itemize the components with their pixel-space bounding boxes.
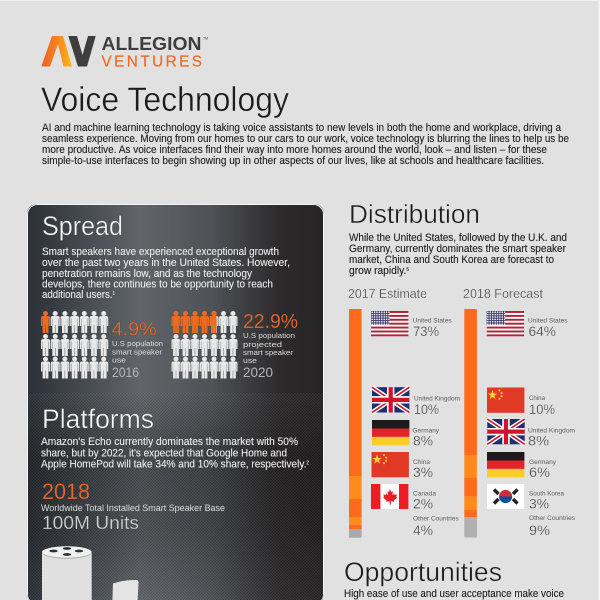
row: Other Countries 9%: Other Countries bbox=[529, 515, 575, 522]
row: United Kingdom 8%: United Kingdom bbox=[528, 428, 575, 435]
row: United States 64% bbox=[487, 311, 568, 339]
row: United States 73%: 73% bbox=[413, 323, 439, 339]
title: Voice Technology bbox=[41, 81, 289, 119]
distribution text block bbox=[349, 232, 567, 277]
row: United States 73%: United States bbox=[413, 318, 452, 325]
intro text block: AI and machine learning technology is taking voice assistants to new levels in both the home and workplace, driving a bbox=[42, 122, 561, 134]
stat: 4.9% in 2016 bbox=[112, 322, 162, 377]
row: United States 64%: United States bbox=[528, 318, 568, 325]
intro text block bbox=[42, 122, 569, 167]
heading: Platforms: Platforms bbox=[42, 404, 154, 434]
opportunities text block: High ease of use and user acceptance make voice bbox=[344, 588, 564, 600]
row: South Korea 3% bbox=[487, 484, 564, 512]
intro text block: more productive. As voice interfaces find their way into more homes around the world, look – and listen – for these bbox=[42, 144, 547, 156]
stat: 2018 installed base: 2018 bbox=[42, 479, 90, 504]
row: Canada 2% bbox=[371, 484, 436, 512]
heading: 2017 Estimate: 2017 Estimate bbox=[348, 287, 427, 301]
stat: 4.9% in 2016: 2016 bbox=[112, 364, 139, 380]
stat: 22.9% in 2020: smart speaker bbox=[243, 348, 293, 357]
logo: Allegion Ventures: ALLEGION bbox=[102, 33, 202, 54]
stacked bar: 2017 bbox=[349, 309, 362, 538]
stat: 22.9% in 2020: use bbox=[243, 356, 257, 365]
stat: 2018 installed base: Worldwide Total Installed Smart Speaker Base bbox=[41, 503, 225, 513]
platforms text block bbox=[41, 436, 309, 471]
heading: Spread: Spread bbox=[42, 211, 123, 241]
row: Germany 6%: 6% bbox=[529, 464, 550, 480]
pictogram: 2016 population bbox=[41, 311, 108, 378]
row: China 3%: China bbox=[413, 459, 430, 466]
icon: Amazon Echo speaker bbox=[42, 546, 92, 600]
spread text block: Smart speakers have experienced exceptional growth bbox=[42, 246, 279, 258]
stat: 22.9% in 2020 bbox=[243, 311, 298, 380]
stat: 4.9% in 2016: smart speaker bbox=[112, 348, 162, 356]
intro text block: simple-to-use interfaces to begin showing up in other aspects of our lives, like at schools and healthcare facilities. bbox=[42, 155, 544, 167]
heading: Opportunities: Opportunities bbox=[344, 557, 502, 587]
logo: Allegion Ventures: VENTURES bbox=[102, 54, 202, 71]
stat: 22.9% in 2020: U.S population bbox=[243, 331, 295, 340]
row: Germany 6% bbox=[487, 452, 557, 480]
row: United Kingdom 8% bbox=[487, 419, 575, 449]
row: United Kingdom 10%: 10% bbox=[414, 401, 439, 417]
column: 2018 forecast bbox=[463, 287, 575, 538]
row: China 10% bbox=[487, 388, 555, 417]
row: Germany 8%: Germany bbox=[412, 428, 440, 435]
row: Germany 8% bbox=[372, 420, 440, 449]
logo: Allegion Ventures bbox=[41, 33, 208, 71]
spread text block: develops, there continues to be opportunity to reach bbox=[42, 278, 273, 290]
stat: 2018 installed base bbox=[41, 484, 225, 529]
stat: 22.9% in 2020: projected bbox=[243, 340, 282, 349]
distribution text block: 5 bbox=[406, 267, 409, 273]
heading: Distribution: Distribution bbox=[349, 201, 480, 229]
stat: 22.9% in 2020: 2020 bbox=[243, 364, 273, 380]
row: United Kingdom 8%: 8% bbox=[528, 433, 549, 449]
heading: 2018 Forecast: 2018 Forecast bbox=[463, 287, 544, 301]
spread text block bbox=[42, 246, 290, 301]
row: China 10%: 10% bbox=[529, 401, 555, 417]
platforms text block: share, but by 2022, it's expected that Google Home and bbox=[41, 448, 287, 460]
platforms text block: Apple HomePod will take 34% and 10% share, respectively. bbox=[41, 459, 326, 471]
platforms text block: 2 bbox=[306, 461, 309, 467]
row: Other Countries 4% bbox=[413, 516, 459, 538]
stat: 4.9% in 2016: use bbox=[112, 356, 126, 365]
row: South Korea 3%: South Korea bbox=[529, 491, 564, 498]
row: China 10%: China bbox=[529, 395, 545, 402]
distribution text block: Germany, currently dominates the smart speaker bbox=[349, 243, 566, 255]
platforms text block: Amazon's Echo currently dominates the market with 50% bbox=[41, 436, 298, 448]
logo: Allegion Ventures: TM bbox=[203, 36, 208, 40]
spread text block: 1 bbox=[113, 291, 115, 297]
spread text block: additional users. bbox=[42, 289, 121, 301]
icon: Google Home speaker bbox=[112, 580, 138, 600]
row: Canada 2%: 2% bbox=[413, 496, 433, 512]
distribution text block: market, China and South Korea are forecast to bbox=[349, 254, 554, 266]
stat: 22.9% in 2020: 22.9% bbox=[243, 311, 298, 333]
distribution text block: While the United States, followed by the U.K. and bbox=[349, 232, 567, 244]
pictogram: 2020 population bbox=[172, 311, 238, 378]
row: Other Countries 4%: Other Countries bbox=[413, 516, 459, 523]
spread text block: over the past two years in the United States. However, bbox=[42, 257, 290, 269]
row: Other Countries 9%: 9% bbox=[529, 522, 550, 538]
row: Canada 2%: Canada bbox=[413, 491, 436, 498]
spread text block: penetration remains low, and as the technology bbox=[42, 268, 253, 280]
row: United Kingdom 10% bbox=[372, 387, 460, 417]
row: United States 73% bbox=[371, 311, 452, 339]
stat: 2018 installed base: 100M Units bbox=[42, 513, 139, 533]
column: 2017 estimate bbox=[348, 287, 460, 538]
row: Other Countries 9% bbox=[529, 515, 575, 538]
row: Germany 6%: Germany bbox=[529, 459, 557, 466]
row: United States 64%: 64% bbox=[528, 323, 556, 339]
row: Other Countries 4%: 4% bbox=[413, 522, 433, 538]
distribution text block: grow rapidly. bbox=[349, 265, 409, 277]
row: Germany 8%: 8% bbox=[413, 433, 433, 449]
row: China 3%: 3% bbox=[413, 464, 433, 480]
stacked bar: 2018 bbox=[464, 309, 477, 538]
stat: 4.9% in 2016: U.S population bbox=[112, 339, 163, 348]
row: China 3% bbox=[372, 452, 433, 480]
row: United Kingdom 10%: United Kingdom bbox=[414, 396, 460, 403]
stat: 4.9% in 2016: 4.9% bbox=[112, 319, 157, 341]
panel: spread and platforms bbox=[27, 204, 324, 600]
row: South Korea 3%: 3% bbox=[529, 496, 549, 512]
